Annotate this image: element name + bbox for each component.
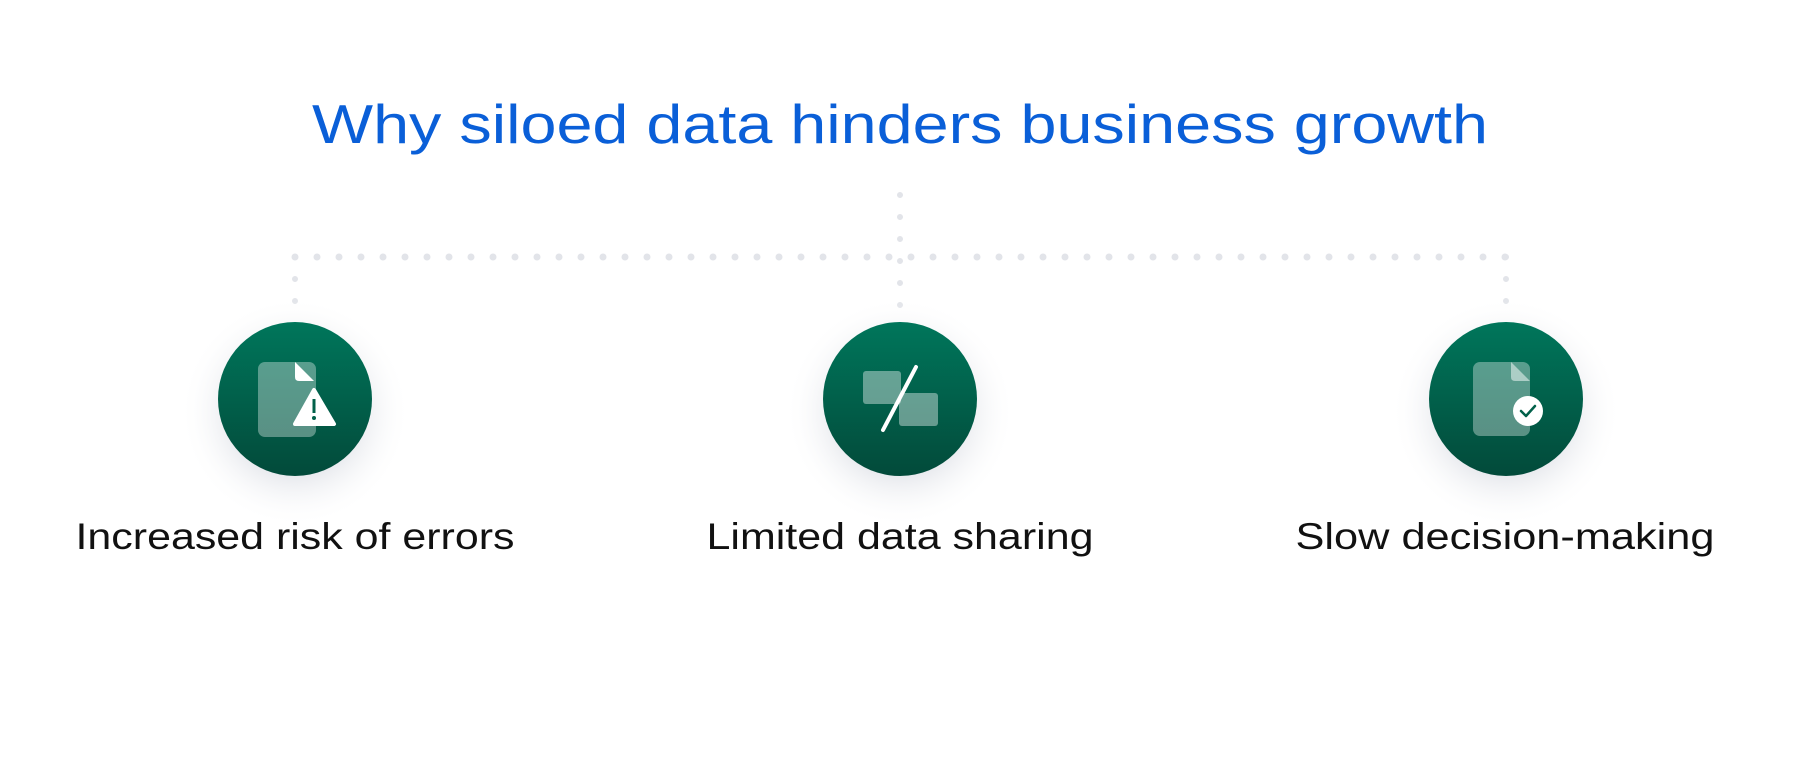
item: limited data sharing — [706, 297, 1094, 557]
title: Why siloed data hinders business growth — [312, 93, 1488, 155]
label: Increased risk of errors — [76, 516, 514, 557]
icon: split blocks — [823, 322, 977, 476]
icon: document with check — [1429, 322, 1583, 476]
item: increased risk of errors — [76, 297, 514, 557]
label: Limited data sharing — [706, 516, 1094, 557]
connector lines — [295, 195, 1506, 322]
item: slow decision-making — [1296, 297, 1714, 557]
icon: document with warning — [218, 322, 372, 476]
label: Slow decision-making — [1296, 516, 1714, 557]
